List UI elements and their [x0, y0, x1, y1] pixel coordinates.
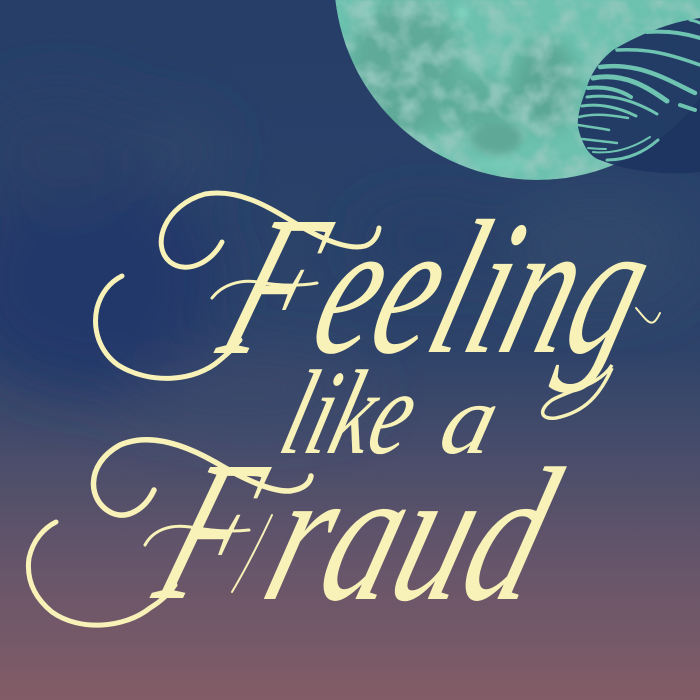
title	[28, 176, 676, 642]
background clouds	[0, 90, 690, 418]
title word: Feeling: F	[197, 176, 353, 397]
title word: Fraud: raud	[245, 429, 579, 641]
title word: Fraud: F	[133, 421, 289, 642]
title word: Fraud	[28, 421, 579, 642]
icon: feather	[578, 18, 700, 174]
title words: like a: like	[268, 347, 433, 480]
moon	[330, 0, 700, 190]
title word: Feeling	[96, 176, 676, 418]
title words: like a: a	[431, 364, 510, 475]
feather strands	[578, 20, 700, 160]
moon surface texture	[350, 0, 577, 140]
